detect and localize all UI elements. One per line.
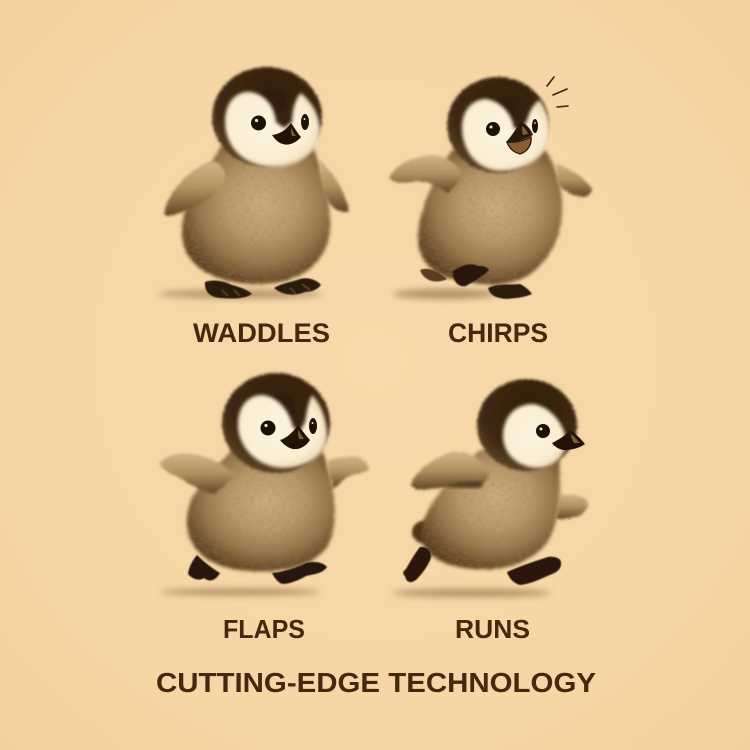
ground shadow [393,289,497,299]
wing underside [446,482,483,488]
beak [552,430,585,450]
right wing [328,456,369,488]
rear foot [403,547,431,582]
title: CUTTING-EDGE TECHNOLOGY [156,667,596,698]
open beak [506,122,533,154]
face [503,404,566,468]
penguin: waddles [158,67,349,299]
hood [447,77,549,173]
rear foot [420,269,447,282]
left foot [188,555,220,580]
right foot [272,562,327,584]
chirp lines [547,77,568,107]
front foot [507,557,561,585]
raised foot [453,264,489,286]
beak [280,425,310,449]
penguin: flaps [160,373,369,596]
body [418,150,562,285]
ground shadow [158,290,322,298]
left wing [160,453,234,494]
body [187,450,335,571]
label: chirps: CHIRPS [448,318,548,348]
hood [222,373,330,473]
label: flaps: FLAPS [223,616,305,644]
body [421,445,560,569]
eyes [486,119,538,136]
eyes [260,418,317,436]
beak [272,123,301,145]
lower foot [488,284,532,299]
right wing [556,494,588,519]
left wing [389,155,462,193]
body [182,145,330,284]
ground shadow [160,588,320,596]
penguin: chirps [389,77,592,299]
ground shadow [392,589,552,597]
face [238,395,327,468]
hood [212,67,322,167]
eye [536,424,550,438]
label: waddles: WADDLES [193,318,330,348]
tail [412,521,434,543]
eyes [251,114,309,130]
hood [477,379,577,471]
face [225,92,320,167]
penguin: runs [392,379,588,597]
feet [205,278,321,299]
left wing [164,162,225,216]
right wing [320,160,349,212]
face [462,99,550,171]
label: runs: RUNS [455,616,530,644]
left wing [411,452,489,489]
right wing [556,163,592,197]
